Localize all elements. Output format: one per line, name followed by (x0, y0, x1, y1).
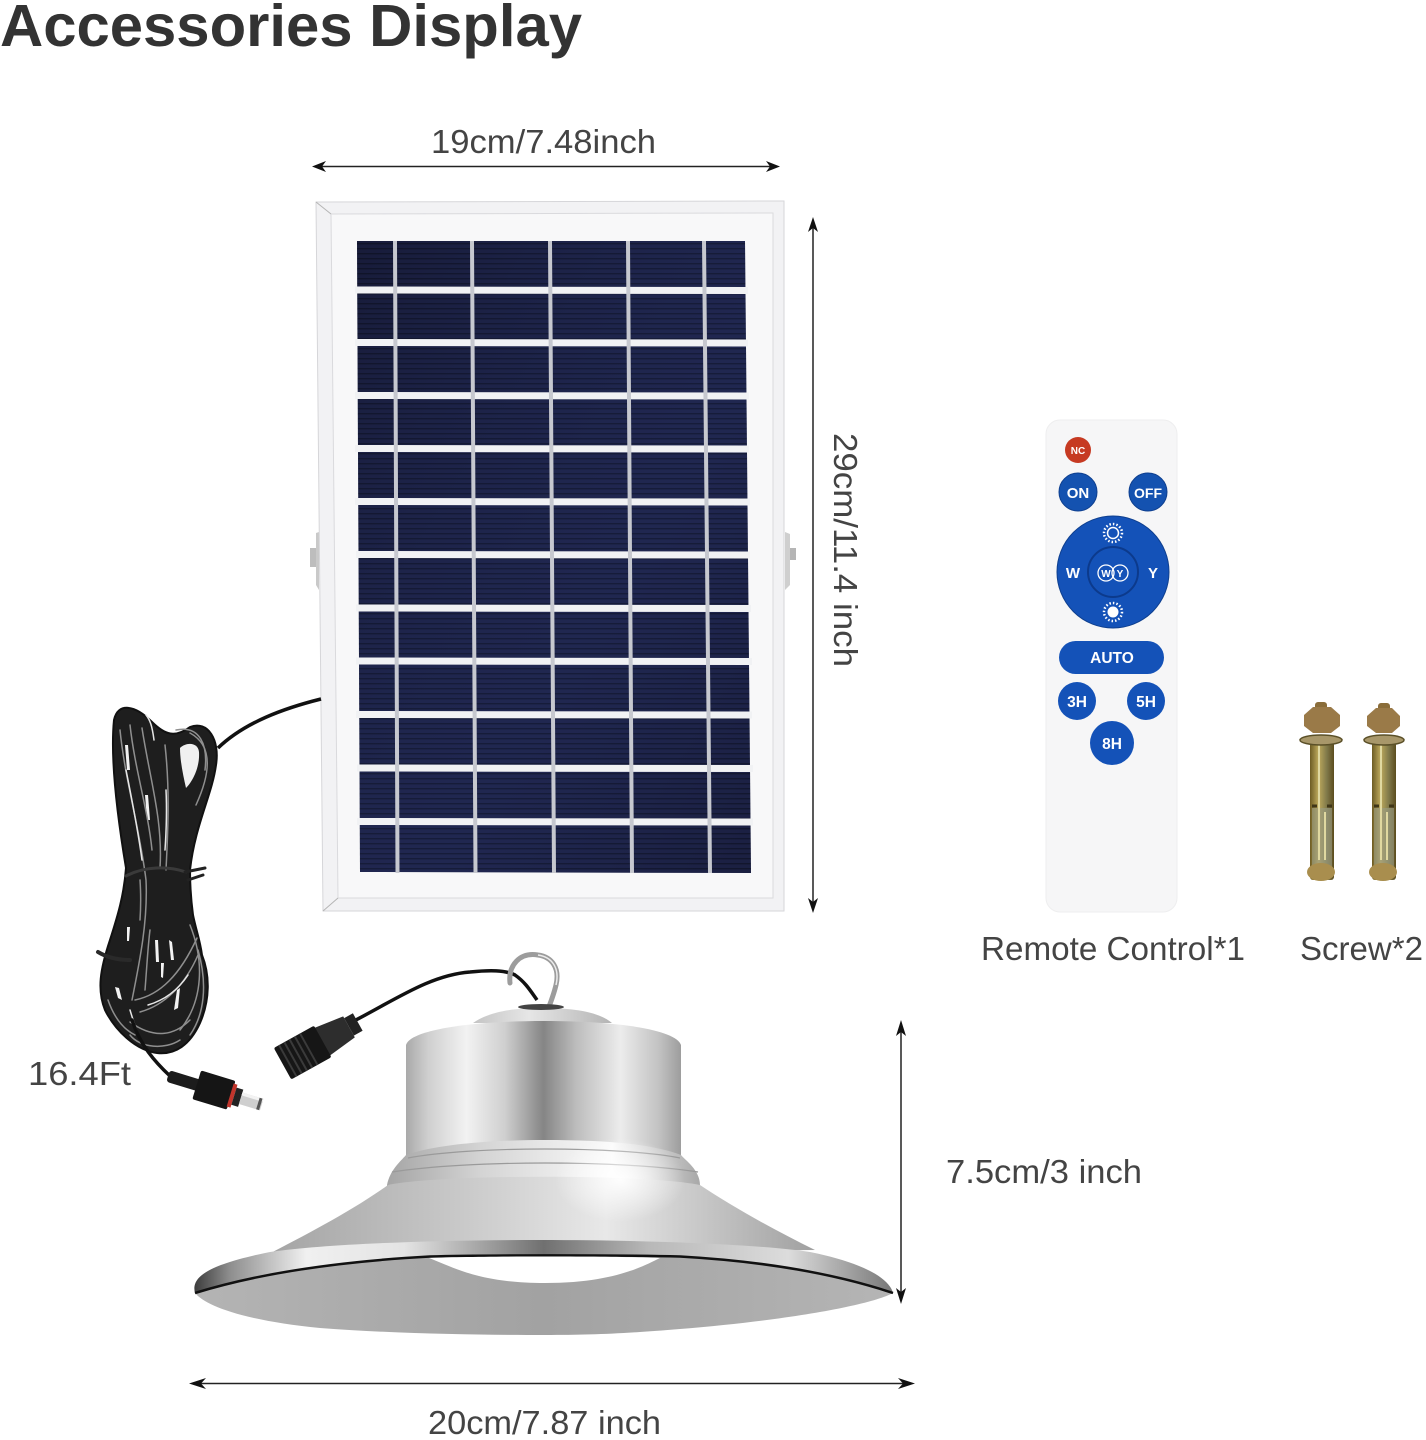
OFF button: OFF (1134, 485, 1162, 501)
remote body (1046, 420, 1177, 912)
hook (510, 955, 557, 1028)
lamp collar (387, 1140, 700, 1192)
lamp cylinder (406, 1021, 681, 1160)
OFF button (1129, 473, 1167, 511)
solar cells (355, 241, 753, 873)
colour and brightness dial: W (1101, 569, 1111, 580)
mounting brackets (310, 532, 796, 590)
lamp cable and female plug (274, 971, 537, 1079)
panel cable (218, 699, 321, 748)
colour and brightness dial (1057, 516, 1169, 628)
dimension: panel width: 19cm/7.48inch (431, 123, 656, 160)
dimension: lamp height (896, 1020, 1142, 1304)
3H button: 3H (1067, 694, 1087, 711)
NC button (1065, 437, 1091, 463)
8H button: 8H (1102, 736, 1122, 753)
lamp shade (265, 1177, 815, 1256)
5H button (1127, 682, 1165, 720)
colour and brightness dial: Y (1117, 569, 1124, 580)
3H button (1058, 682, 1096, 720)
lamp dome cap (473, 1008, 612, 1023)
colour and brightness dial: Y (1148, 565, 1158, 582)
dimension: lamp width (189, 1378, 915, 1440)
lamp rim (194, 1240, 893, 1293)
dimension: panel height (808, 217, 864, 913)
white slivers between strands (115, 745, 180, 1010)
lamp interior (195, 1256, 893, 1335)
lead to plug (132, 1020, 170, 1076)
white gap in loop (180, 744, 199, 788)
dimension: lamp width: 20cm/7.87 inch (428, 1404, 661, 1440)
cable tie (126, 868, 186, 876)
cable coil (98, 708, 217, 1076)
label: screws: Screw*2 (1300, 930, 1423, 967)
pendant lamp (194, 955, 893, 1335)
male DC plug (164, 1062, 266, 1119)
coil mass (100, 708, 217, 1053)
dimension: panel height: 29cm/11.4 inch (827, 433, 864, 667)
dimension: panel width (312, 123, 780, 172)
remote control (1046, 420, 1177, 912)
lit bulb (429, 1256, 660, 1283)
solar panel (218, 201, 796, 911)
strand highlights (108, 725, 207, 1046)
screw left (1300, 702, 1342, 881)
screw right (1364, 703, 1404, 881)
label: cable length: 16.4Ft (28, 1055, 131, 1092)
5H button: 5H (1136, 694, 1156, 711)
ON button (1059, 473, 1097, 511)
NC button: NC (1071, 446, 1085, 457)
colour and brightness dial: W (1066, 565, 1081, 582)
8H button (1090, 721, 1134, 765)
ON button: ON (1067, 485, 1089, 502)
label: remote control: Remote Control*1 (981, 930, 1245, 967)
AUTO button (1059, 641, 1164, 674)
dimension: lamp height: 7.5cm/3 inch (946, 1153, 1142, 1190)
panel frame (316, 201, 784, 911)
AUTO button: AUTO (1090, 650, 1134, 667)
